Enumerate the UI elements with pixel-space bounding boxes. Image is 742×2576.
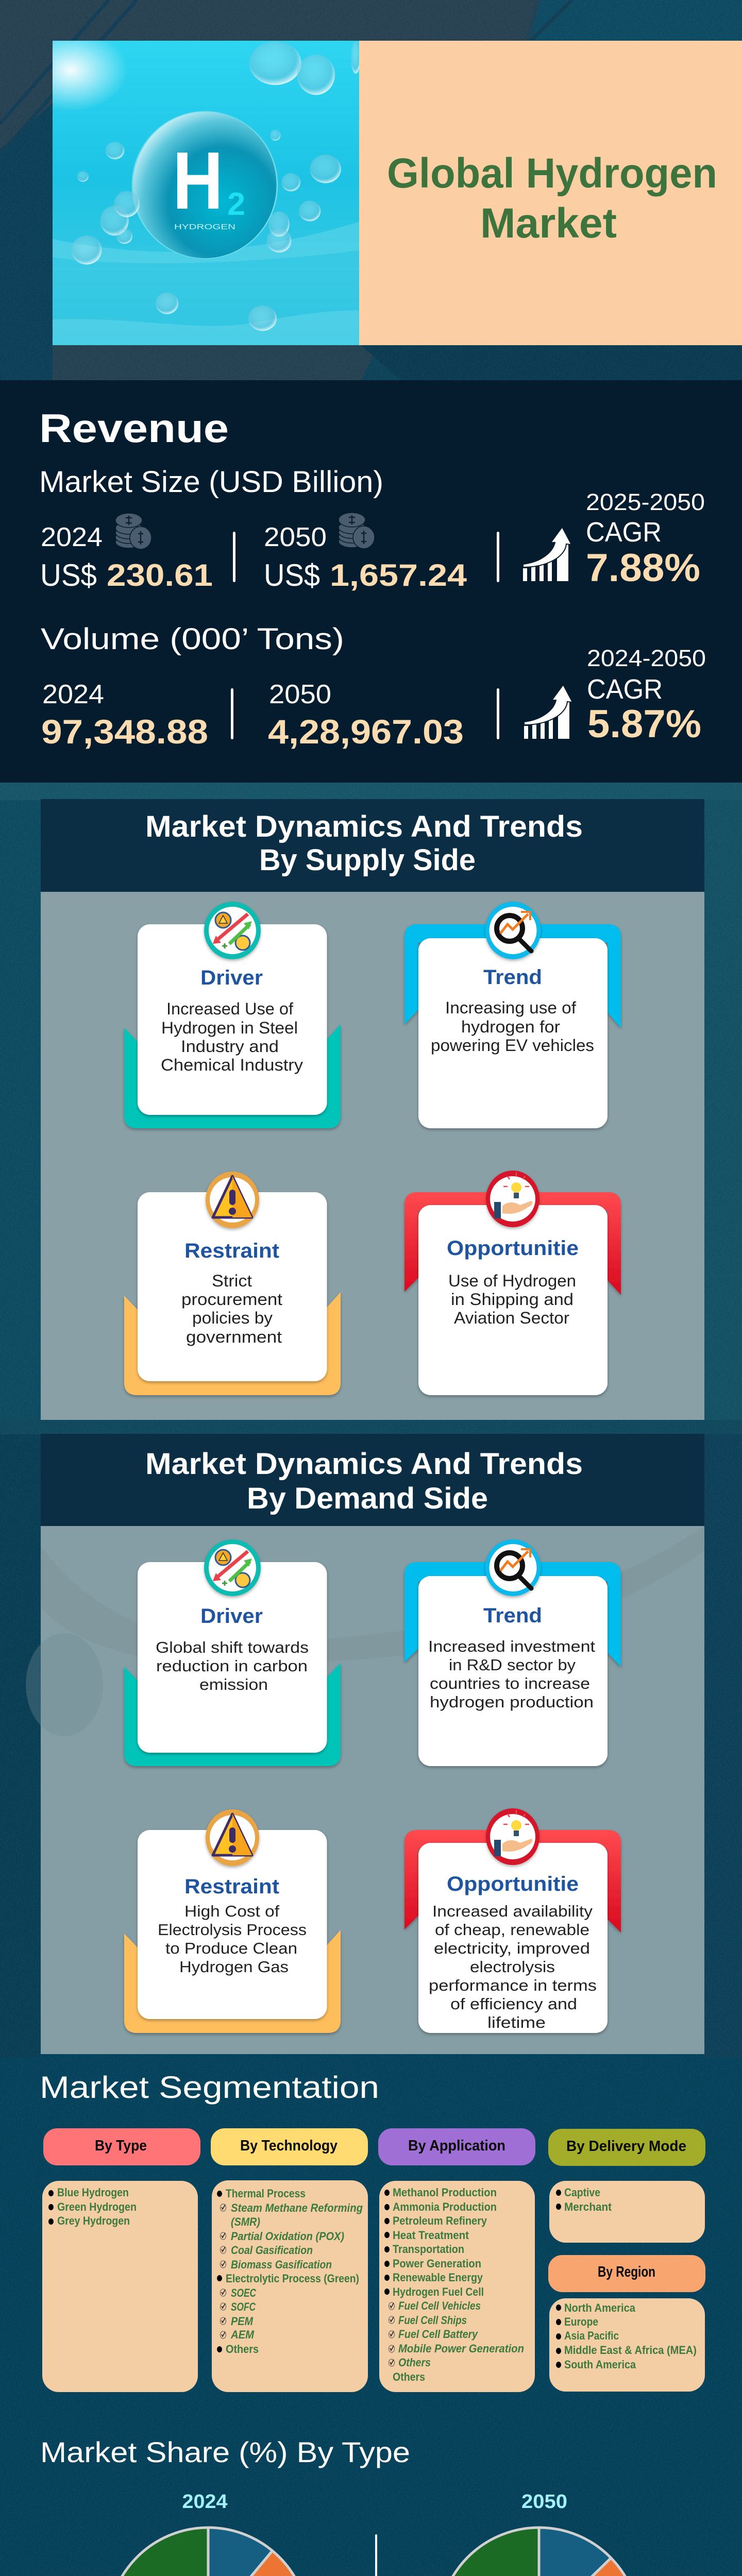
heading: demand side: Market Dynamics And Trends: [145, 1447, 583, 1481]
market size block: US$: [264, 558, 320, 592]
card: supply restraint: Restraint: [184, 1240, 279, 1262]
segment: by application: By Application: [408, 2138, 505, 2154]
section: market share by type: [40, 2436, 695, 2576]
card: demand opportunity: lifetime: [487, 2013, 546, 2031]
volume block: [41, 622, 706, 751]
segment: by region: Asia Pacific: [564, 2329, 619, 2342]
card: demand driver: reduction in carbon: [156, 1657, 308, 1675]
card: supply restraint: government: [186, 1328, 282, 1346]
segment: by technology: [211, 2128, 368, 2392]
card: demand trend: in R&D sector by: [449, 1656, 576, 1674]
market size block: CAGR: [586, 517, 662, 548]
card: demand restraint: Electrolysis Process: [158, 1921, 307, 1939]
heading: demand side: By Demand Side: [247, 1482, 488, 1515]
card: supply driver: Hydrogen in Steel: [161, 1019, 298, 1037]
card: demand restraint: [124, 1809, 341, 2033]
panel: supply side dynamics: [41, 799, 704, 1420]
card: demand driver: Driver: [200, 1605, 263, 1628]
heading: market segmentation: Market Segmentation: [40, 2070, 379, 2105]
market size block: Market Size (USD Billion): [39, 465, 383, 499]
heading: revenue: Revenue: [39, 405, 229, 451]
segment: by application: Fuel Cell Vehicles: [398, 2299, 481, 2312]
card: demand opportunity: of efficiency and: [450, 1995, 577, 2013]
card: supply driver: Industry and: [181, 1037, 279, 1056]
card: demand opportunity: Increased availability: [432, 1902, 593, 1920]
heading: demand side: [145, 1447, 583, 1515]
panel: revenue: [0, 380, 742, 783]
market size block: 230.61: [107, 558, 213, 592]
card: demand opportunity: [404, 1808, 621, 2033]
card: demand opportunity: electricity, improved: [434, 1939, 590, 1957]
segment: by technology: By Technology: [240, 2138, 338, 2154]
segment: by application: Fuel Cell Battery: [398, 2328, 479, 2341]
market size block: US$: [40, 558, 97, 592]
year label 2050: 2050: [521, 2491, 567, 2513]
card: demand opportunity: of cheap, renewable: [435, 1921, 589, 1939]
segment: by application: Others: [393, 2370, 425, 2383]
segment: by application: Fuel Cell Ships: [398, 2314, 467, 2327]
segment: by application: Methanol Production: [393, 2186, 497, 2199]
segment: by delivery mode: Captive: [564, 2186, 600, 2199]
card: demand restraint: Hydrogen Gas: [179, 1958, 289, 1976]
hero image: hydrogen molecule: 2: [227, 187, 245, 222]
segment: by type: By Type: [95, 2138, 147, 2154]
card: demand restraint: to Produce Clean: [165, 1939, 297, 1957]
segment: by technology: Others: [226, 2343, 259, 2355]
segment: by region: Europe: [564, 2315, 598, 2328]
segment: by technology: SOEC: [231, 2286, 257, 2299]
segment: by technology: (SMR): [231, 2215, 260, 2228]
market size block: 7.88%: [586, 546, 700, 590]
segment: by delivery mode: [548, 2129, 705, 2243]
volume block: 4,28,967.03: [268, 713, 464, 751]
card: supply opportunity: in Shipping and: [451, 1290, 574, 1309]
segment: by application: [378, 2128, 535, 2392]
segment: by region: By Region: [598, 2264, 655, 2280]
market size block: [39, 465, 705, 592]
title panel: Global Hydrogen: [387, 150, 717, 197]
card: demand driver: Global shift towards: [156, 1638, 309, 1656]
hero image: hydrogen molecule: [53, 41, 359, 345]
card: supply driver: Increased Use of: [166, 999, 293, 1018]
card: supply opportunity: Use of Hydrogen: [448, 1272, 576, 1290]
segment: by region: North America: [564, 2301, 636, 2314]
card: supply driver: Chemical Industry: [161, 1056, 303, 1074]
segment: by type: Green Hydrogen: [57, 2200, 137, 2213]
segment: by region: Middle East & Africa (MEA): [564, 2344, 697, 2357]
card: supply trend: Increasing use of: [445, 998, 576, 1017]
market size block: 1,657.24: [330, 558, 467, 592]
segment: by application: Power Generation: [393, 2257, 481, 2270]
card: demand opportunity: Opportunitie: [447, 1873, 579, 1895]
card: supply restraint: Strict: [212, 1272, 252, 1290]
card: demand restraint: High Cost of: [184, 1902, 279, 1920]
segment: by technology: Electrolytic Process (Green): [226, 2272, 359, 2285]
volume block: 2024-2050: [587, 645, 706, 671]
segment: by technology: PEM: [231, 2315, 254, 2328]
segment: by application: Heat Treatment: [393, 2229, 469, 2242]
segment: by type: [42, 2128, 200, 2392]
market size block: 2025-2050: [586, 489, 705, 515]
card: demand driver: [124, 1539, 341, 1766]
card: supply opportunity: Aviation Sector: [454, 1309, 569, 1327]
hero image: hydrogen molecule: HYDROGEN: [174, 223, 235, 231]
title panel: [359, 41, 742, 345]
card: demand driver: emission: [199, 1675, 268, 1693]
segment: by type: Grey Hydrogen: [57, 2214, 130, 2227]
segment: by application: Renewable Energy: [393, 2271, 483, 2284]
segment: by delivery mode: By Delivery Mode: [566, 2138, 686, 2155]
segment: by application: Mobile Power Generation: [398, 2342, 524, 2355]
segment: by application: Transportation: [393, 2243, 464, 2256]
panel: demand side dynamics: [26, 1434, 704, 2054]
segment: by type: Blue Hydrogen: [57, 2186, 129, 2199]
segment: by technology: SOFC: [231, 2300, 256, 2313]
segment: by application: Ammonia Production: [393, 2200, 497, 2213]
segment: by technology: Steam Methane Reforming: [231, 2201, 363, 2214]
card: supply trend: hydrogen for: [461, 1018, 560, 1036]
pie chart: type 2024: [108, 2528, 309, 2576]
card: demand opportunity: electrolysis: [470, 1958, 555, 1976]
card: demand trend: hydrogen production: [430, 1693, 594, 1711]
card: demand opportunity: performance in terms: [429, 1976, 597, 1994]
segment: by technology: Partial Oxidation (POX): [231, 2230, 344, 2243]
card: supply restraint: policies by: [192, 1309, 273, 1327]
card: demand trend: countries to increase: [430, 1674, 590, 1692]
title panel: Market: [480, 200, 617, 247]
card: demand trend: [404, 1539, 621, 1766]
volume block: 2024: [42, 680, 104, 709]
card: supply trend: powering EV vehicles: [431, 1036, 594, 1055]
segment: by application: Hydrogen Fuel Cell: [393, 2285, 484, 2298]
market size block: 2050: [264, 522, 327, 552]
heading: supply side: Market Dynamics And Trends: [145, 810, 583, 843]
heading: supply side: [145, 810, 583, 877]
pie chart: type 2050: [439, 2528, 639, 2576]
segment: by technology: AEM: [230, 2328, 255, 2341]
volume block: 97,348.88: [41, 713, 208, 751]
heading: share by type: Market Share (%) By Type: [40, 2436, 410, 2468]
volume block: CAGR: [587, 674, 663, 705]
segment: by application: Petroleum Refinery: [393, 2214, 487, 2227]
card: demand restraint: Restraint: [184, 1875, 279, 1898]
card: supply driver: Driver: [200, 967, 263, 989]
card: supply trend: Trend: [483, 966, 542, 989]
segment: by region: South America: [564, 2358, 636, 2371]
volume block: 5.87%: [587, 702, 701, 746]
segment: by technology: Coal Gasification: [231, 2244, 313, 2257]
card: demand trend: Increased investment: [428, 1637, 595, 1655]
heading: supply side: By Supply Side: [259, 843, 476, 877]
segment: by technology: Thermal Process: [226, 2187, 306, 2200]
year label 2024: 2024: [182, 2491, 228, 2513]
market size block: 2024: [41, 522, 103, 552]
card: supply driver: [124, 902, 341, 1128]
segment: by technology: Biomass Gasification: [231, 2258, 332, 2271]
card: supply opportunity: Opportunitie: [447, 1237, 579, 1260]
segment: by region: [548, 2255, 705, 2392]
segment: by application: Others: [398, 2356, 431, 2369]
hero image: hydrogen molecule: H: [173, 135, 223, 226]
segment: by delivery mode: Merchant: [564, 2200, 612, 2213]
volume block: Volume (000’ Tons): [41, 622, 344, 656]
card: supply restraint: procurement: [181, 1290, 282, 1309]
card: supply trend: [404, 902, 621, 1128]
card: demand trend: Trend: [483, 1604, 542, 1627]
card: supply opportunity: [404, 1171, 621, 1395]
card: supply restraint: [124, 1172, 341, 1395]
volume block: 2050: [269, 680, 331, 709]
